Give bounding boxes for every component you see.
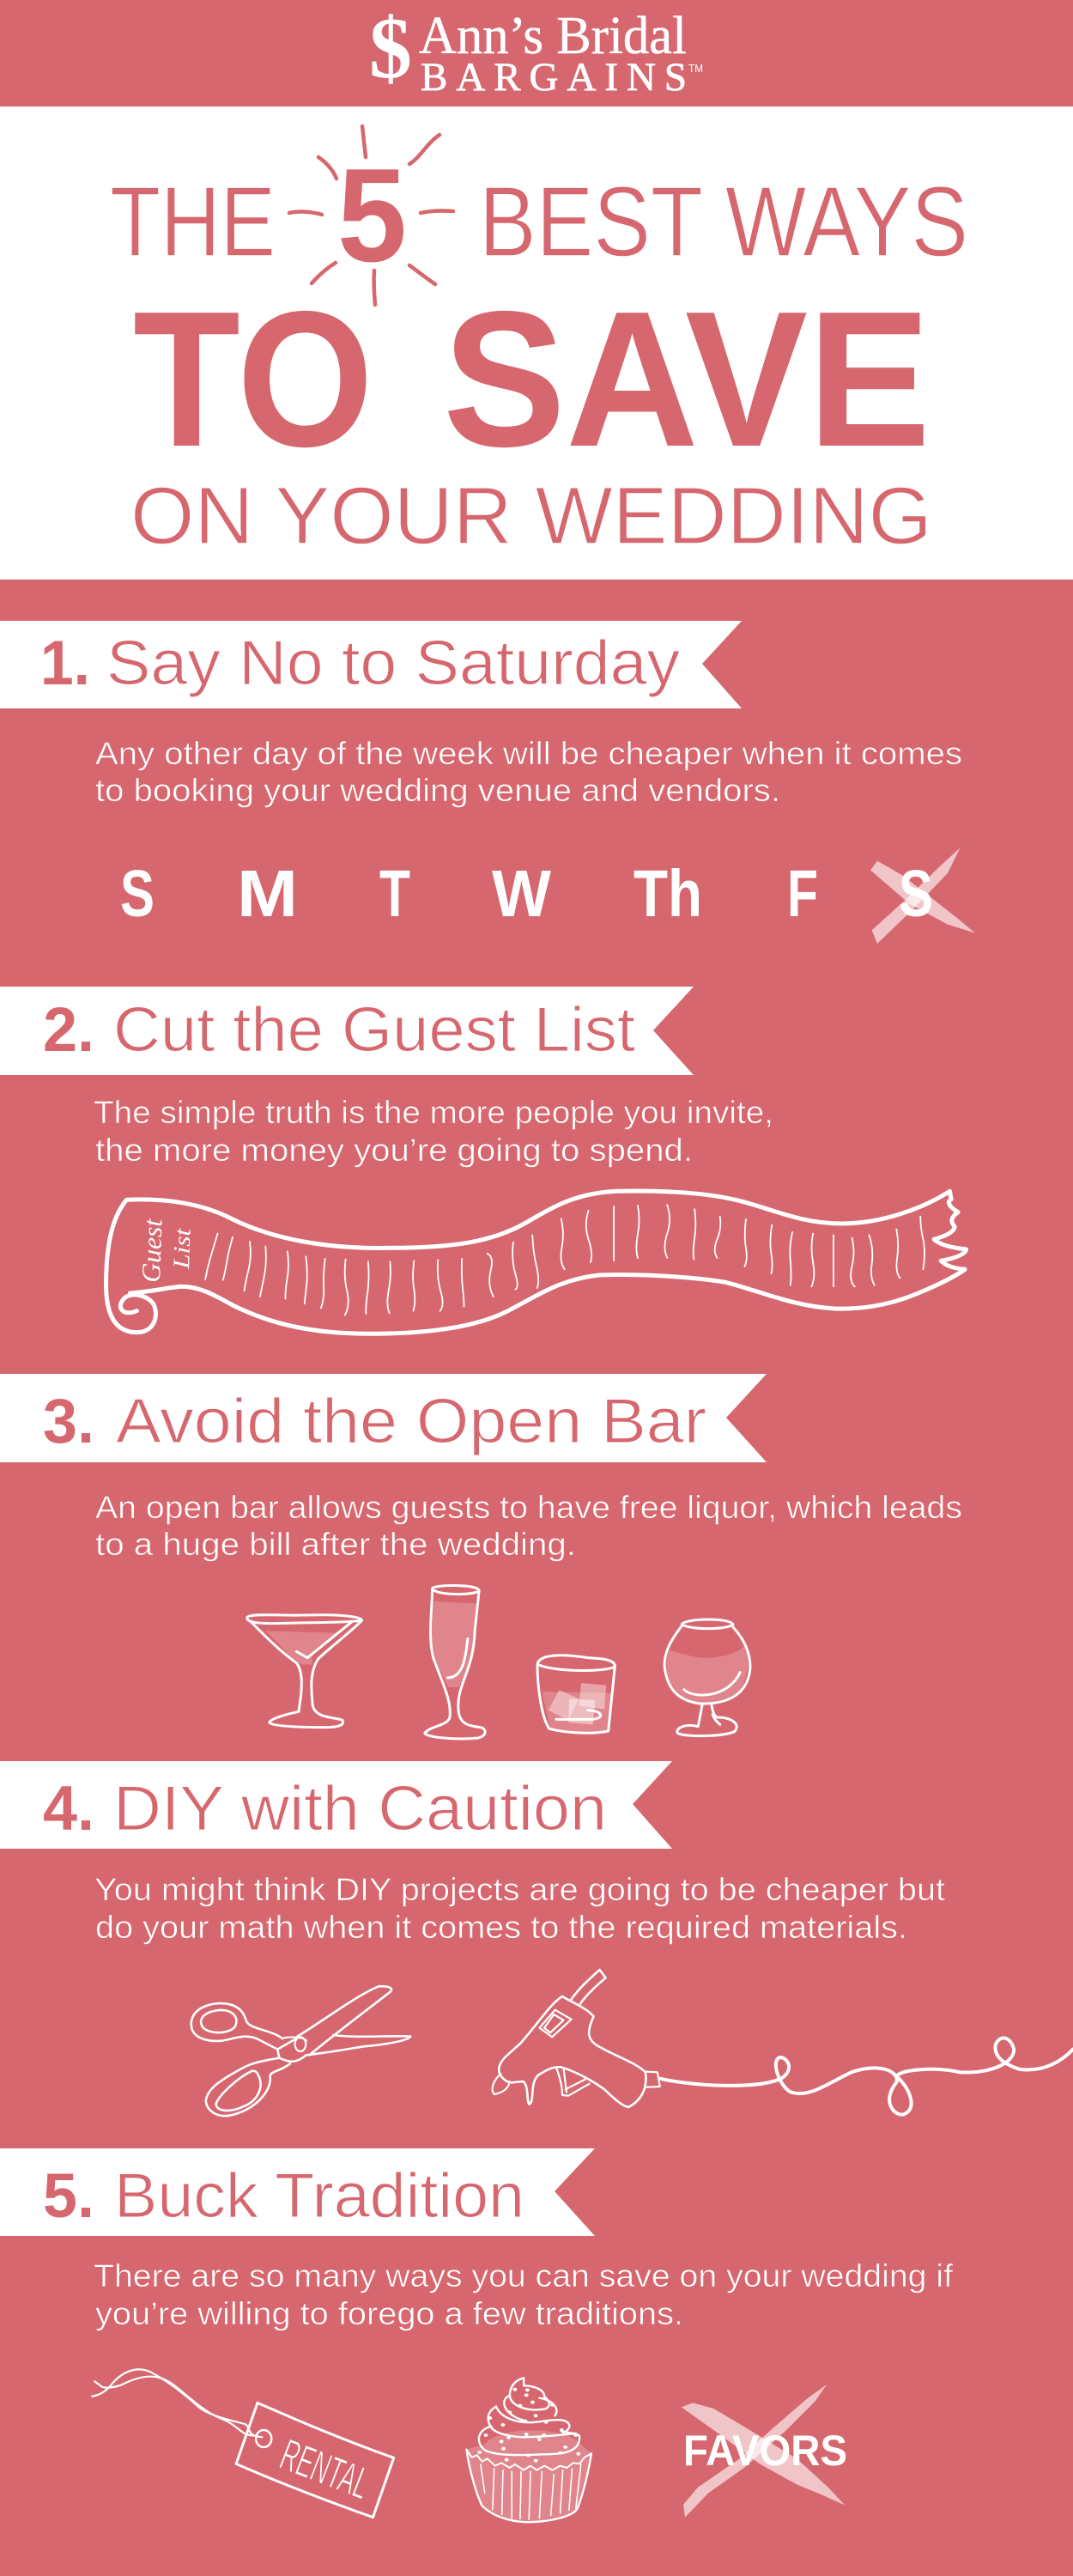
icon: brush X over Saturday: [870, 848, 975, 944]
weekday letters: W: [492, 857, 551, 931]
panel: 1. Say No to Saturday: [0, 621, 975, 944]
ribbon heading 4: DIY with Caution: [113, 1774, 607, 1844]
panel: 2. Cut the Guest List: [0, 987, 967, 1334]
title line: TO SAVE: SAVE: [443, 270, 931, 487]
weekday letters: Th: [633, 857, 702, 931]
icons: four drink glasses: [247, 1585, 750, 1739]
icon: cupcake: [467, 2378, 591, 2522]
icon: favors crossed out: FAVORS: [683, 2427, 847, 2475]
icon: rocks glass with ice: [537, 1656, 615, 1733]
logo: Ann's Bridal Bargains: Ann’s Bridal: [419, 7, 687, 65]
body text 1: to booking your wedding venue and vendors.: [95, 773, 780, 808]
body text 2: the more money you’re going to spend.: [95, 1133, 693, 1168]
title line: TO SAVE: [133, 270, 931, 487]
ribbon heading 2: 2.: [43, 995, 94, 1065]
script label: Guest List: Guest: [136, 1218, 168, 1283]
logo: Ann's Bridal Bargains: TM: [688, 62, 703, 75]
script label: Guest List: [136, 1218, 196, 1283]
panel: 5. Buck Tradition: [0, 2148, 954, 2522]
title line: THE 5 BEST WAYS: THE: [110, 166, 276, 277]
icon: sun rays around the 5: [289, 126, 453, 305]
body text 4: You might think DIY projects are going to be cheaper but: [94, 1872, 946, 1907]
title line: ON YOUR WEDDING: ON YOUR WEDDING: [130, 471, 932, 562]
ribbon heading 5: [0, 2148, 595, 2236]
panel: 3. Avoid the Open Bar: [0, 1374, 962, 1739]
title line: TO SAVE: TO: [133, 270, 373, 487]
ribbon heading 4: 4.: [43, 1774, 94, 1844]
body text 1: [95, 736, 962, 808]
icon: scissors: [191, 1986, 410, 2116]
ribbon heading 3: Avoid the Open Bar: [116, 1387, 706, 1456]
body text 1: Any other day of the week will be cheaper when it comes: [95, 736, 962, 771]
weekday letters: S: [120, 857, 155, 931]
body text 5: [94, 2258, 954, 2331]
title line: THE 5 BEST WAYS: 5: [337, 141, 407, 289]
logo: Ann's Bridal Bargains: BARGAINS: [421, 55, 687, 100]
ribbon heading 1: Say No to Saturday: [106, 629, 681, 698]
ribbon heading 5: Buck Tradition: [114, 2161, 524, 2231]
weekday letters: [120, 857, 933, 931]
body text 4: do your math when it comes to the required materials.: [95, 1910, 907, 1945]
icon: guest list scroll: [106, 1191, 967, 1334]
ribbon heading 3: 3.: [43, 1387, 94, 1456]
logo: Ann's Bridal Bargains: $: [369, 0, 412, 97]
body text 2: [94, 1095, 773, 1168]
body text 3: [95, 1490, 962, 1562]
ribbon heading 1: 1.: [40, 629, 90, 698]
title line: THE 5 BEST WAYS: [110, 141, 968, 289]
weekday letters: M: [237, 857, 298, 931]
icon: brandy snifter: [664, 1619, 750, 1736]
weekday letters: F: [787, 857, 818, 931]
title line: THE 5 BEST WAYS: BEST WAYS: [479, 166, 968, 277]
body text 3: to a huge bill after the wedding.: [95, 1527, 576, 1562]
ribbon heading 2: Cut the Guest List: [113, 995, 635, 1065]
ribbon heading 2: [0, 987, 694, 1075]
weekday letters: S: [899, 857, 933, 931]
ribbon heading 5: 5.: [43, 2161, 94, 2231]
logo: Ann's Bridal Bargains: [369, 0, 703, 100]
icon: favors crossed out: [682, 2385, 847, 2518]
weekday letters: T: [379, 857, 410, 931]
ribbon heading 1: [0, 621, 742, 708]
ribbon heading 4: [0, 1761, 672, 1849]
icon: glue gun: [493, 1970, 1073, 2115]
panel: 4. DIY with Caution: [0, 1761, 1073, 2116]
body text 5: There are so many ways you can save on your wedding if: [94, 2258, 954, 2293]
title panel: [0, 106, 1073, 580]
tag label: RENTAL: [274, 2430, 376, 2509]
icon: martini glass: [247, 1615, 361, 1728]
script label: Guest List: List: [168, 1226, 196, 1270]
icon: champagne flute: [425, 1585, 485, 1739]
icons: scissors and glue gun: [191, 1970, 1073, 2116]
icon: rental price tag: [92, 2369, 394, 2518]
body text 4: [94, 1872, 946, 1945]
body text 2: The simple truth is the more people you invite,: [94, 1095, 773, 1130]
body text 5: you’re willing to forego a few traditions.: [95, 2296, 683, 2331]
ribbon heading 3: [0, 1374, 767, 1462]
body text 3: An open bar allows guests to have free liquor, which leads: [95, 1490, 962, 1525]
